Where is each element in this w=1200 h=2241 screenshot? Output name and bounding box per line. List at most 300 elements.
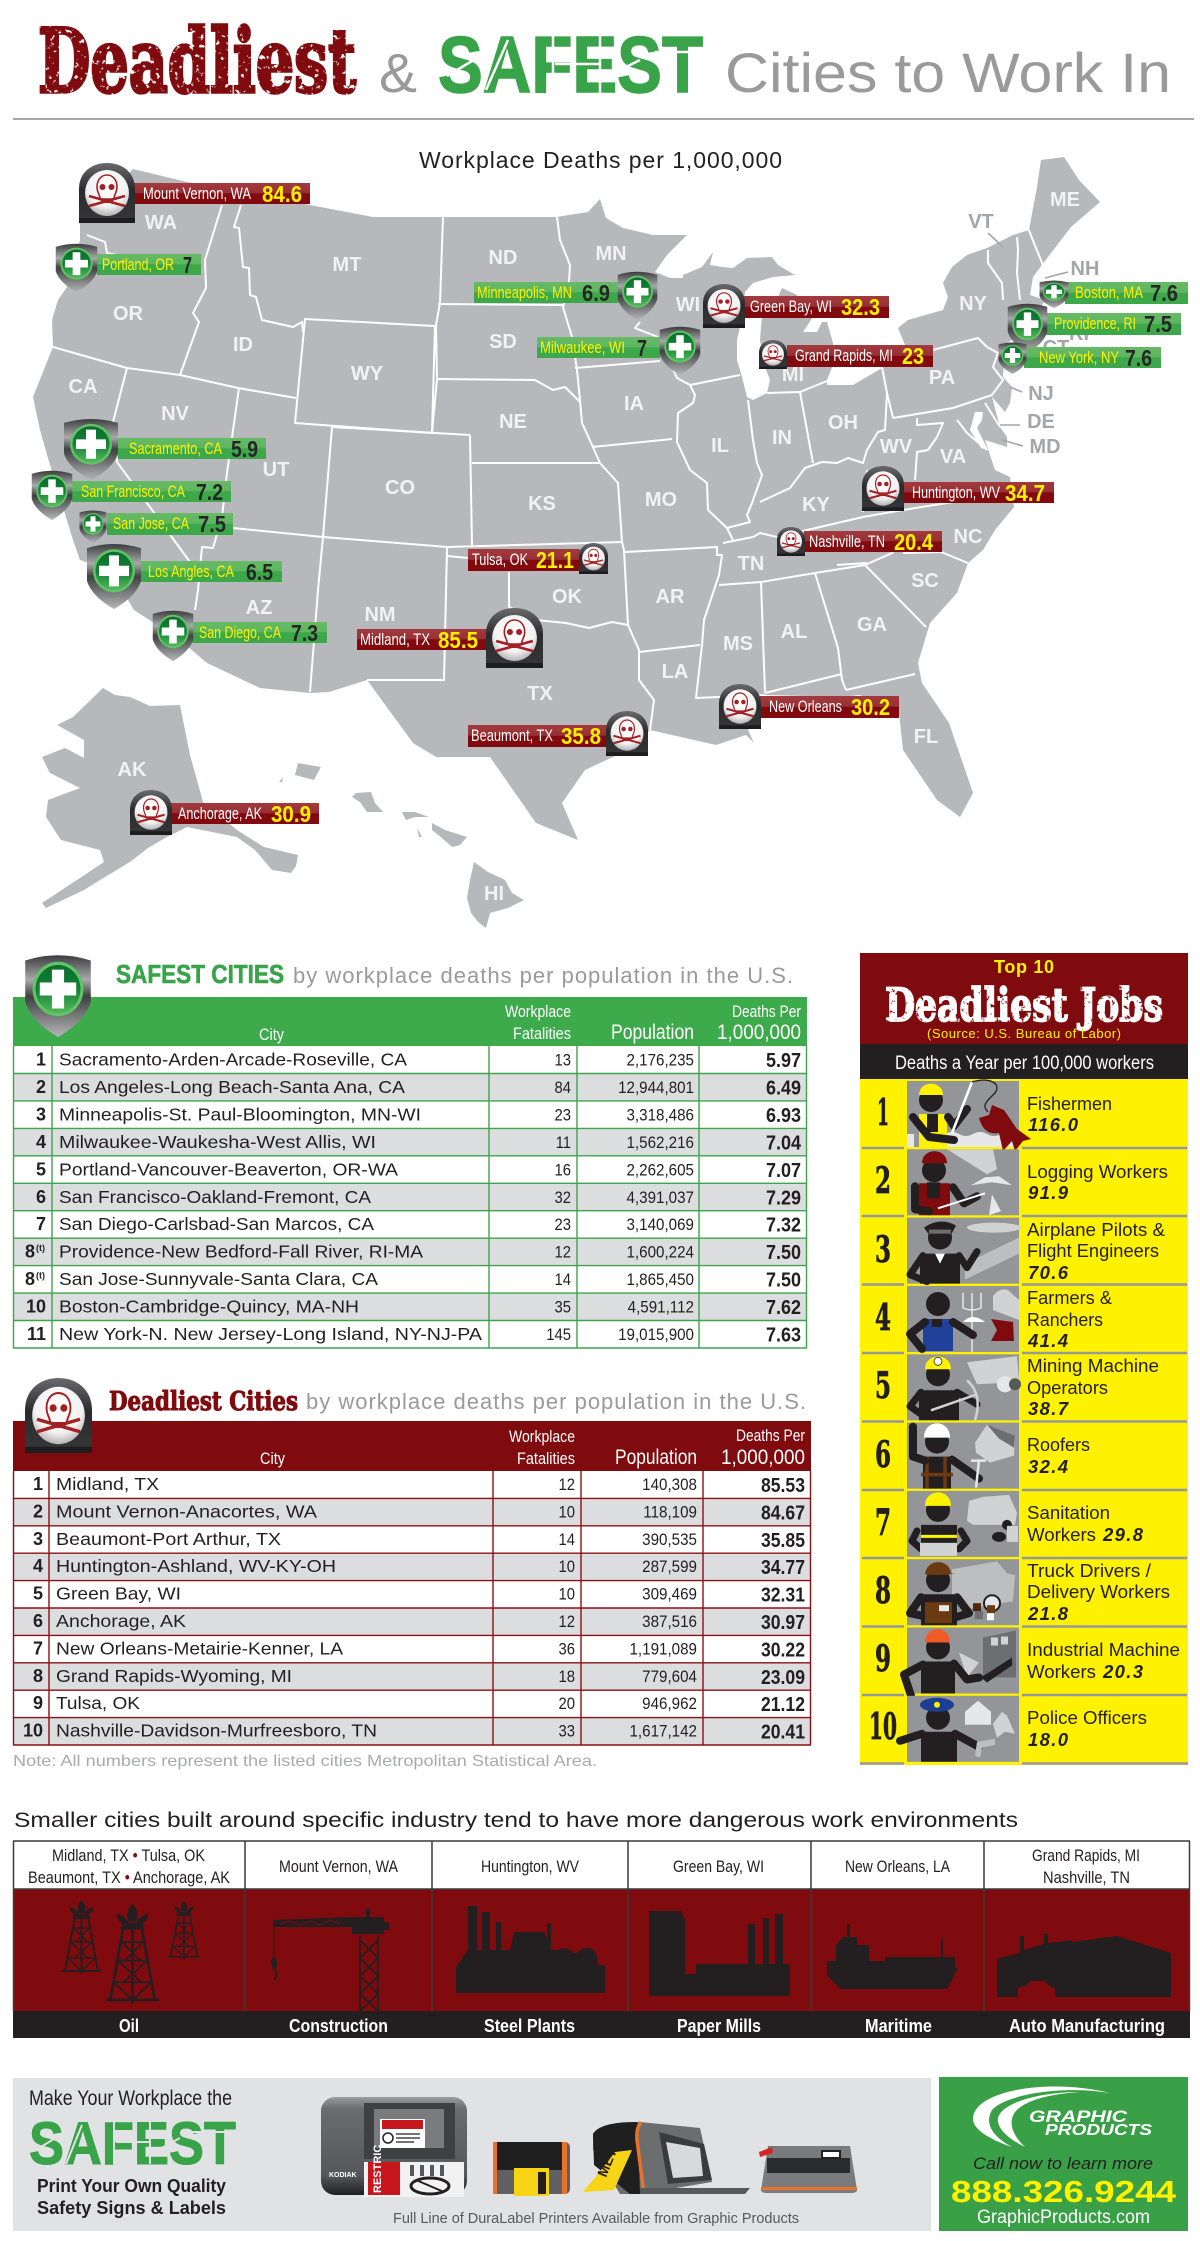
callout: San Francisco: San Francisco, CA: [81, 483, 185, 501]
state labels: IL: [711, 435, 729, 457]
deadliest table rows: [13, 1471, 811, 1745]
deadliest table rows: 18: [558, 1668, 575, 1686]
state labels: WI: [676, 294, 700, 316]
map subtitle: Workplace Deaths per 1,000,000: [419, 147, 782, 173]
safest table rows: 4,391,037: [626, 1189, 694, 1207]
job 2: logging workers: 2: [875, 1160, 891, 1202]
job 10: police officers: 10: [869, 1706, 897, 1748]
job 3: airplane pilots: Flight Engineers: [1027, 1240, 1159, 1261]
panel: top 10 deadliest jobs: [860, 953, 1188, 1765]
industry cities: [28, 1847, 1140, 1887]
callout: San Diego: 7.3: [291, 620, 318, 646]
safest table rows: 6.49: [766, 1078, 801, 1100]
callout: Green Bay: 32.3: [841, 294, 880, 320]
deadliest table rows: 9: [33, 1693, 43, 1713]
job 5: mining machine operators: Operators: [1027, 1377, 1108, 1398]
state labels: OK: [552, 586, 583, 608]
callout: Tulsa: Tulsa, OK: [472, 551, 528, 569]
deadliest table rows: Anchorage, AK: [56, 1611, 186, 1631]
ad text: Print Your Own Quality: [37, 2176, 226, 2196]
state labels: [69, 189, 1099, 905]
state labels: LA: [662, 661, 688, 683]
state labels: MD: [1029, 436, 1061, 458]
safest table rows: 145: [546, 1326, 571, 1344]
job 5: mining machine operators: Mining Machine: [1027, 1355, 1159, 1376]
callout: San Diego: San Diego, CA: [199, 624, 281, 642]
state labels: WA: [145, 212, 177, 234]
deadliest table rows: 20.41: [761, 1721, 805, 1743]
safest table rows: 7: [36, 1214, 46, 1234]
safest table rows: 19,015,900: [618, 1326, 694, 1344]
deadliest table rows: 6: [33, 1611, 43, 1631]
callout: Portland: Portland, OR: [102, 256, 174, 274]
callout: Huntington: [862, 466, 1054, 511]
safest table rows: 1,600,224: [626, 1244, 694, 1262]
deadliest table rows: 1,617,142: [629, 1723, 697, 1741]
industries heading: Smaller cities built around specific industry tend to have more dangerous work environments: [14, 1809, 1018, 1832]
job 4: farmers and ranchers: Ranchers: [1027, 1309, 1103, 1330]
callout: Huntington: 34.7: [1005, 480, 1045, 506]
job 4: farmers and ranchers: 41.4: [1027, 1330, 1068, 1351]
job 7: sanitation workers: 29.8: [1102, 1524, 1144, 1545]
jobs header: [860, 953, 1188, 1044]
safest table rows: 7.29: [766, 1187, 801, 1210]
callout: Boston: [1040, 280, 1188, 308]
logo: graphic products: [973, 2086, 1152, 2147]
callout: Milwaukee: Milwaukee, WI: [540, 339, 625, 357]
state labels: UT: [263, 459, 289, 481]
job 7: sanitation workers: [875, 1491, 1144, 1557]
title: &: [379, 42, 417, 104]
deadliest table rows: 14: [558, 1531, 575, 1549]
callout: Tulsa: [468, 543, 608, 574]
callout: Midland: [357, 608, 543, 668]
safest table rows: 1,562,216: [626, 1134, 694, 1152]
callout: Anchorage: Anchorage, AK: [178, 805, 262, 823]
state labels: IN: [772, 427, 792, 449]
safest table rows: 11: [556, 1134, 571, 1152]
deadliest table rows: 309,469: [642, 1586, 697, 1604]
callout: Beaumont: Beaumont, TX: [471, 727, 553, 745]
callout: New York: 7.6: [1125, 345, 1152, 371]
callout: Los Angeles: Los Angles, CA: [148, 563, 234, 581]
icon: paper mill: [649, 1911, 790, 1996]
printer 3: [583, 2122, 750, 2194]
jobs list background: [860, 1079, 1188, 1765]
safest table rows: 5: [36, 1159, 46, 1179]
callout: New York: New York, NY: [1039, 349, 1119, 367]
deadliest table rows: 779,604: [642, 1668, 697, 1686]
safest table rows: 10: [26, 1297, 46, 1317]
industry cities: Beaumont, TX • Anchorage, AK: [28, 1869, 230, 1887]
callout: Providence: Providence, RI: [1054, 315, 1136, 333]
deadliest table rows: Nashville-Davidson-Murfreesboro, TN: [56, 1721, 377, 1741]
deadliest table rows: New Orleans-Metairie-Kenner, LA: [56, 1638, 343, 1658]
state labels: AZ: [246, 597, 272, 619]
callout: Sacramento: 5.9: [231, 436, 258, 462]
logo: graphic products: GRAPHIC: [1029, 2107, 1128, 2126]
industry cities: Midland, TX • Tulsa, OK: [52, 1847, 205, 1865]
state labels: CO: [385, 477, 415, 499]
deadliest table rows: 946,962: [642, 1696, 697, 1713]
safest table rows: 8: [25, 1269, 35, 1289]
safest table rows: 7.04: [766, 1133, 801, 1155]
deadliest table header: Fatalities: [517, 1449, 575, 1468]
deadliest heading: by workplace deaths per population in the U.S.: [306, 1389, 806, 1414]
state labels: RI: [1069, 323, 1089, 345]
safest table rows: 3,318,486: [626, 1107, 694, 1125]
deadliest heading: Deadliest Cities: [109, 1387, 298, 1417]
job 10: police officers: Police Officers: [1027, 1707, 1147, 1728]
deadliest table rows: 85.53: [761, 1474, 805, 1496]
deadliest table rows: Green Bay, WI: [56, 1584, 181, 1604]
safest table rows: 7.07: [766, 1160, 801, 1182]
job 1: fishermen: [877, 1080, 1112, 1151]
callout: Minneapolis: Minneapolis, MN: [477, 284, 572, 302]
job 9: industrial machine workers: 20.3: [1102, 1661, 1144, 1682]
deadliest table rows: 30.22: [761, 1638, 805, 1661]
state labels: NE: [499, 411, 527, 433]
industry names: Auto Manufacturing: [1009, 2016, 1165, 2036]
industry cities: Mount Vernon, WA: [279, 1858, 398, 1876]
safest heading: SAFEST CITIES: [116, 959, 284, 989]
job 7: sanitation workers: Workers: [1027, 1524, 1096, 1545]
deadliest table rows: 8: [33, 1666, 43, 1686]
safest table rows: 35: [554, 1299, 571, 1317]
job 9: industrial machine workers: 9: [875, 1638, 891, 1680]
job 6: roofers: [875, 1423, 1090, 1489]
callout: Midland: Midland, TX: [360, 631, 430, 649]
safest table rows: 4: [36, 1132, 46, 1152]
callout: San Jose: San Jose, CA: [113, 515, 189, 533]
safest table rows: 23: [554, 1217, 571, 1234]
callout: Beaumont: 35.8: [561, 723, 601, 749]
job 5: mining machine operators: 38.7: [1028, 1398, 1070, 1419]
safest table rows: San Diego-Carlsbad-San Marcos, CA: [59, 1214, 374, 1234]
callout: Sacramento: Sacramento, CA: [129, 440, 222, 458]
job 9: industrial machine workers: Workers: [1027, 1661, 1096, 1682]
safest table rows: Portland-Vancouver-Beaverton, OR-WA: [59, 1159, 398, 1179]
job 4: farmers and ranchers: [875, 1286, 1113, 1352]
safest table rows: San Jose-Sunnyvale-Santa Clara, CA: [59, 1269, 378, 1289]
industry cities: Grand Rapids, MI: [1032, 1847, 1140, 1865]
safest table rows: 14: [554, 1271, 571, 1289]
state labels: ND: [489, 247, 517, 269]
safest table rows: 2,176,235: [626, 1052, 694, 1070]
callout: Nashville: Nashville, TN: [809, 533, 885, 551]
lower 48 silhouette: [33, 157, 1100, 840]
callout: Mount Vernon: 84.6: [262, 181, 302, 207]
callout: Grand Rapids: [759, 340, 933, 369]
safest table rows: (t): [36, 1270, 45, 1280]
job 2: logging workers: [875, 1149, 1168, 1215]
job 5: mining machine operators: [875, 1354, 1159, 1420]
printer 1: KODIAK: [329, 2172, 357, 2179]
state labels: DE: [1027, 411, 1055, 433]
callout: Minneapolis: 6.9: [582, 280, 610, 306]
callout: Mount Vernon: Mount Vernon, WA: [143, 185, 251, 203]
deadliest table rows: 36: [558, 1641, 575, 1659]
state labels: SD: [489, 331, 517, 353]
job 6: roofers: 6: [875, 1434, 891, 1476]
panel: industries strip: [13, 1841, 1190, 2038]
call to action: Call now to learn more: [973, 2154, 1153, 2173]
state labels: PA: [929, 367, 955, 389]
callout: Providence: [1008, 304, 1181, 353]
state labels: OH: [828, 412, 858, 434]
title: [38, 9, 1171, 113]
deadliest table rows: 287,599: [642, 1559, 697, 1576]
safest table rows: Providence-New Bedford-Fall River, RI-MA: [59, 1242, 423, 1262]
deadliest table rows: 1: [33, 1474, 43, 1494]
state labels: NV: [161, 403, 190, 425]
deadliest table rows: 2: [33, 1501, 43, 1521]
callout: San Diego: [153, 611, 327, 661]
deadliest table rows: 35.85: [761, 1529, 805, 1551]
industry cities: Huntington, WV: [481, 1858, 579, 1876]
job 10: police officers: 18.0: [1028, 1729, 1069, 1750]
industry names: Maritime: [865, 2016, 932, 2036]
callout: San Francisco: [32, 471, 231, 520]
safest table rows: 4,591,112: [628, 1299, 694, 1317]
title: Cities to Work In: [725, 41, 1171, 104]
state labels: TN: [738, 553, 764, 575]
safest table rows: 7.62: [766, 1297, 801, 1319]
state labels: AK: [118, 759, 147, 781]
ad text: Make Your Workplace the: [29, 2087, 232, 2110]
job 6: roofers: 32.4: [1028, 1456, 1068, 1477]
safest table rows: 1: [36, 1050, 46, 1070]
deadliest table rows: 5: [33, 1584, 43, 1604]
safest table rows: 23: [554, 1107, 571, 1125]
job 3: airplane pilots: [875, 1218, 1166, 1284]
job 1: fishermen: 116.0: [1028, 1114, 1079, 1135]
safest table rows: 3,140,069: [626, 1217, 694, 1234]
industry cities: Green Bay, WI: [673, 1858, 764, 1876]
callout: Anchorage: [130, 790, 319, 835]
safest table rows: 7.32: [766, 1215, 801, 1237]
job 8: truck drivers: Delivery Workers: [1027, 1581, 1170, 1602]
deadliest table rows: Grand Rapids-Wyoming, MI: [56, 1666, 292, 1686]
deadliest table rows: 390,535: [642, 1531, 697, 1549]
printers caption: Full Line of DuraLabel Printers Available from Graphic Products: [393, 2211, 799, 2227]
ad text: [29, 2087, 236, 2218]
job 8: truck drivers: [875, 1559, 1170, 1625]
safest table header: 1,000,000: [717, 1021, 801, 1044]
callout: Boston: 7.6: [1150, 280, 1178, 306]
panel: printers ad: [13, 2078, 931, 2231]
job 3: airplane pilots: Airplane Pilots &: [1027, 1219, 1166, 1240]
icon: steel plant: [456, 1906, 605, 1993]
leader lines: [988, 233, 1068, 446]
jobs header: (Source: U.S. Bureau of Labor): [927, 1026, 1121, 1041]
state labels: MT: [333, 254, 361, 276]
callout: Beaumont: [468, 711, 648, 756]
state labels: MS: [723, 633, 753, 655]
state labels: FL: [914, 726, 938, 748]
state labels: MI: [782, 364, 804, 386]
deadliest table rows: 84.67: [761, 1501, 805, 1524]
deadliest table rows: 387,516: [642, 1613, 697, 1631]
safest heading: [116, 959, 793, 989]
job 7: sanitation workers: 7: [875, 1502, 891, 1544]
callout: Boston: Boston, MA: [1075, 284, 1143, 302]
state labels: KS: [528, 493, 556, 515]
deadliest table rows: Tulsa, OK: [56, 1693, 140, 1713]
safest table rows: 5.97: [766, 1050, 801, 1072]
job 9: industrial machine workers: Industrial Machine: [1027, 1639, 1180, 1660]
safest table header: [13, 997, 807, 1046]
callout: Providence: 7.5: [1144, 311, 1172, 337]
safest table rows: 6.93: [766, 1105, 801, 1127]
ad text: Safety Signs & Labels: [37, 2198, 226, 2218]
job 1: fishermen: 1: [877, 1092, 889, 1134]
alaska and hawaii: [42, 688, 524, 928]
state labels: GA: [857, 614, 887, 636]
icon: oil derricks: [62, 1900, 200, 2004]
state labels: TX: [527, 683, 553, 705]
deadliest table header: 1,000,000: [721, 1446, 805, 1469]
deadliest table header: City: [260, 1449, 285, 1468]
state labels: MO: [645, 489, 677, 511]
job 8: truck drivers: Truck Drivers /: [1027, 1560, 1152, 1581]
icon: deadliest skull: [25, 1378, 92, 1453]
safest table rows: New York-N. New Jersey-Long Island, NY-NJ-PA: [59, 1324, 482, 1344]
callout: Anchorage: 30.9: [271, 801, 311, 827]
industry cities: New Orleans, LA: [845, 1858, 950, 1876]
safest table header: Population: [611, 1021, 694, 1044]
deadliest table rows: 140,308: [642, 1476, 697, 1494]
safest table rows: Minneapolis-St. Paul-Bloomington, MN-WI: [59, 1104, 421, 1124]
icon: crane: [271, 1909, 389, 2011]
jobs subheader: Deaths a Year per 100,000 workers: [895, 1053, 1154, 1074]
safest table rows: 8: [25, 1242, 35, 1262]
safest table rows: 7.50: [766, 1270, 801, 1292]
callout: Mount Vernon: [79, 163, 310, 223]
callout: New Orleans: New Orleans: [769, 698, 842, 716]
state labels: SC: [911, 570, 939, 592]
deadliest table rows: 118,109: [643, 1504, 697, 1522]
panel: deadliest cities table: [13, 1378, 811, 1770]
industry names: Construction: [289, 2016, 388, 2036]
state labels: ME: [1050, 189, 1080, 211]
ad text: SAFEST: [29, 2110, 236, 2177]
job 3: airplane pilots: 70.6: [1028, 1262, 1069, 1283]
state borders: [53, 205, 1045, 730]
state labels: WY: [351, 363, 384, 385]
safest table rows: 6: [36, 1187, 46, 1207]
callout: Los Angeles: [87, 544, 282, 609]
callout: New Orleans: [719, 684, 899, 729]
website: GraphicProducts.com: [977, 2207, 1150, 2228]
safest table header: Workplace: [505, 1002, 571, 1021]
callout: San Jose: [80, 511, 233, 543]
printer 1: RESTRIC: [372, 2145, 384, 2193]
safest table rows: 2: [36, 1077, 46, 1097]
deadliest table rows: 10: [558, 1559, 575, 1576]
callout: Grand Rapids: 23: [902, 343, 924, 369]
logo: graphic products: PRODUCTS: [1045, 2122, 1152, 2139]
state labels: NC: [954, 526, 982, 548]
callout: Grand Rapids: Grand Rapids, MI: [795, 347, 893, 365]
state labels: IA: [624, 393, 644, 415]
job 2: logging workers: 91.9: [1028, 1182, 1069, 1203]
deadliest table header: Workplace: [509, 1427, 575, 1446]
icon: auto plant: [997, 1934, 1171, 1997]
job 4: farmers and ranchers: 4: [875, 1297, 891, 1339]
deadliest table rows: 21.12: [761, 1693, 805, 1715]
state labels: WV: [880, 436, 913, 458]
icon: ship: [827, 1924, 958, 1989]
safest table header: Deaths Per: [732, 1002, 801, 1021]
note: Note: All numbers represent the listed cities Metropolitan Statistical Area.: [13, 1753, 597, 1770]
deadliest table rows: Huntington-Ashland, WV-KY-OH: [56, 1556, 336, 1576]
phone number: 888.326.9244: [951, 2174, 1177, 2209]
deadliest table rows: 23.09: [761, 1666, 805, 1688]
callout: Milwaukee: [537, 327, 700, 375]
deadliest table header: [13, 1421, 811, 1471]
deadliest table rows: 12: [558, 1476, 575, 1494]
deadliest table rows: 12: [558, 1613, 575, 1631]
callout: Portland: 7: [183, 252, 192, 278]
state labels: VT: [968, 211, 994, 233]
safest table rows: Los Angeles-Long Beach-Santa Ana, CA: [59, 1077, 405, 1097]
industry names: Paper Mills: [677, 2016, 761, 2036]
state labels: CA: [69, 376, 97, 398]
deadliest table header: Population: [615, 1446, 697, 1469]
state labels: MN: [595, 243, 627, 265]
callout: Huntington: Huntington, WV: [912, 484, 1000, 502]
deadliest table rows: Beaumont-Port Arthur, TX: [56, 1529, 281, 1549]
industry names: Oil: [119, 2016, 139, 2036]
safest heading: by workplace deaths per population in the U.S.: [293, 963, 793, 988]
callout: New York: [999, 342, 1161, 374]
safest table rows: 12: [554, 1244, 571, 1262]
job 3: airplane pilots: 3: [875, 1229, 891, 1271]
panel: contact: [939, 2077, 1188, 2231]
printer 4: [759, 2146, 857, 2193]
state labels: CT: [1043, 337, 1069, 359]
deadliest table rows: 4: [33, 1556, 43, 1576]
US map: [33, 157, 1100, 928]
job 4: farmers and ranchers: Farmers &: [1027, 1287, 1113, 1308]
deadliest table rows: 20: [558, 1696, 575, 1713]
deadliest table rows: 7: [33, 1638, 43, 1658]
safest table rows: 12,944,801: [618, 1079, 694, 1097]
state labels: AL: [781, 621, 807, 643]
deadliest table rows: 1,191,089: [629, 1641, 697, 1659]
callout: Nashville: [777, 527, 942, 556]
deadliest table rows: Midland, TX: [56, 1474, 159, 1494]
callout: Milwaukee: 7: [637, 335, 647, 361]
safest table rows: (t): [36, 1243, 45, 1253]
state labels: KY: [802, 494, 831, 516]
callout: Los Angeles: 6.5: [246, 559, 273, 585]
job 5: mining machine operators: 5: [875, 1365, 891, 1407]
safest table rows: 16: [554, 1162, 571, 1180]
safest table rows: 2,262,605: [626, 1162, 694, 1179]
icon: safest shield: [25, 955, 91, 1037]
title: Deadliest: [38, 9, 356, 113]
safest table rows: 7.63: [766, 1325, 801, 1347]
printer 3: MET: [594, 2145, 620, 2179]
callout: Green Bay: [703, 284, 889, 328]
safest table rows: 84: [554, 1079, 571, 1097]
deadliest table rows: 32.31: [761, 1584, 805, 1606]
state labels: AR: [656, 586, 685, 608]
industry cities: Nashville, TN: [1043, 1869, 1130, 1887]
industry names: Steel Plants: [484, 2016, 575, 2036]
